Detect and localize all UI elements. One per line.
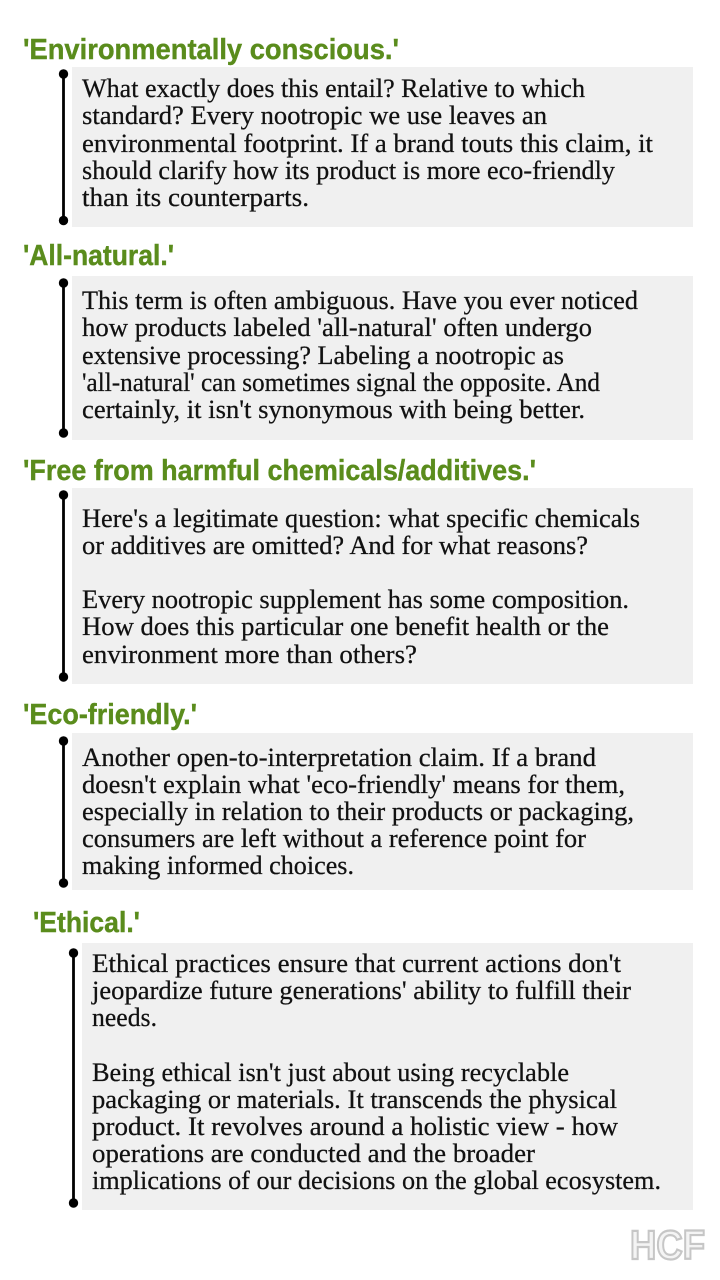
body text 5: packaging or materials. It transcends the physical — [92, 1085, 617, 1114]
body text 4: doesn't explain what 'eco-friendly' means for them, — [82, 770, 625, 799]
body text 5: Ethical practices ensure that current actions don't — [92, 949, 622, 978]
timeline marker 1 — [59, 69, 68, 225]
body text 5: jeopardize future generations' ability to fulfill their — [91, 976, 631, 1005]
heading: Eco-friendly: 'Eco-friendly.' — [23, 699, 197, 731]
body text 2: 'all-natural' can sometimes signal the opposite. And — [82, 368, 600, 397]
timeline marker 3 — [59, 490, 68, 682]
body text 4: consumers are left without a reference point for — [82, 824, 586, 853]
body text 2: This term is often ambiguous. Have you ever noticed — [82, 286, 638, 315]
heading: Free from harmful chemicals: 'Free from harmful chemicals/additives.' — [23, 455, 536, 487]
panel: All-natural — [59, 276, 693, 440]
body text 1: should clarify how its product is more eco-friendly — [82, 156, 615, 185]
timeline marker 4 — [59, 736, 68, 888]
body text 2: how products labeled 'all-natural' often undergo — [82, 313, 592, 342]
heading: Environmentally conscious: 'Environmentally conscious.' — [23, 34, 399, 66]
timeline marker 2 — [59, 278, 68, 438]
heading: Ethical: 'Ethical.' — [33, 907, 140, 939]
body text 5: needs. — [92, 1003, 157, 1032]
body text 1: What exactly does this entail? Relative to which — [82, 74, 585, 103]
body text 5: operations are conducted and the broader — [92, 1139, 535, 1168]
body text 5: implications of our decisions on the global ecosystem. — [92, 1166, 661, 1195]
body text 3: Every nootropic supplement has some composition. — [82, 585, 629, 614]
body text 1: environmental footprint. If a brand touts this claim, it — [82, 129, 654, 158]
body text 2: extensive processing? Labeling a nootropic as — [82, 341, 564, 370]
body text 3: How does this particular one benefit health or the — [82, 612, 609, 641]
body text 3: Here's a legitimate question: what specific chemicals — [82, 504, 640, 533]
body text 5: product. It revolves around a holistic view - how — [92, 1112, 618, 1141]
panel: Eco-friendly — [59, 733, 693, 890]
body text 2 — [82, 286, 638, 424]
body text 1: than its counterparts. — [82, 183, 309, 212]
heading: All-natural: 'All-natural.' — [23, 240, 174, 272]
body text 4: making informed choices. — [82, 851, 354, 880]
body text 4: Another open-to-interpretation claim. If a brand — [82, 743, 596, 772]
body text 3 — [82, 504, 640, 669]
logo: HCF: HCF — [630, 1222, 705, 1268]
body text 3: or additives are omitted? And for what reasons? — [82, 531, 588, 560]
panel: Ethical — [69, 943, 693, 1210]
body text 3: environment more than others? — [82, 640, 417, 669]
body text 1: standard? Every nootropic we use leaves an — [82, 101, 547, 130]
body text 2: certainly, it isn't synonymous with being better. — [82, 395, 585, 424]
panel: Environmentally conscious — [59, 67, 693, 227]
body text 1 — [82, 74, 654, 212]
panel: Free from harmful chemicals — [59, 488, 693, 684]
body text 4 — [82, 743, 634, 880]
body text 4: especially in relation to their products or packaging, — [82, 797, 634, 826]
body text 5: Being ethical isn't just about using recyclable — [92, 1058, 569, 1087]
body text 5 — [91, 949, 661, 1195]
timeline marker 5 — [69, 948, 78, 1208]
